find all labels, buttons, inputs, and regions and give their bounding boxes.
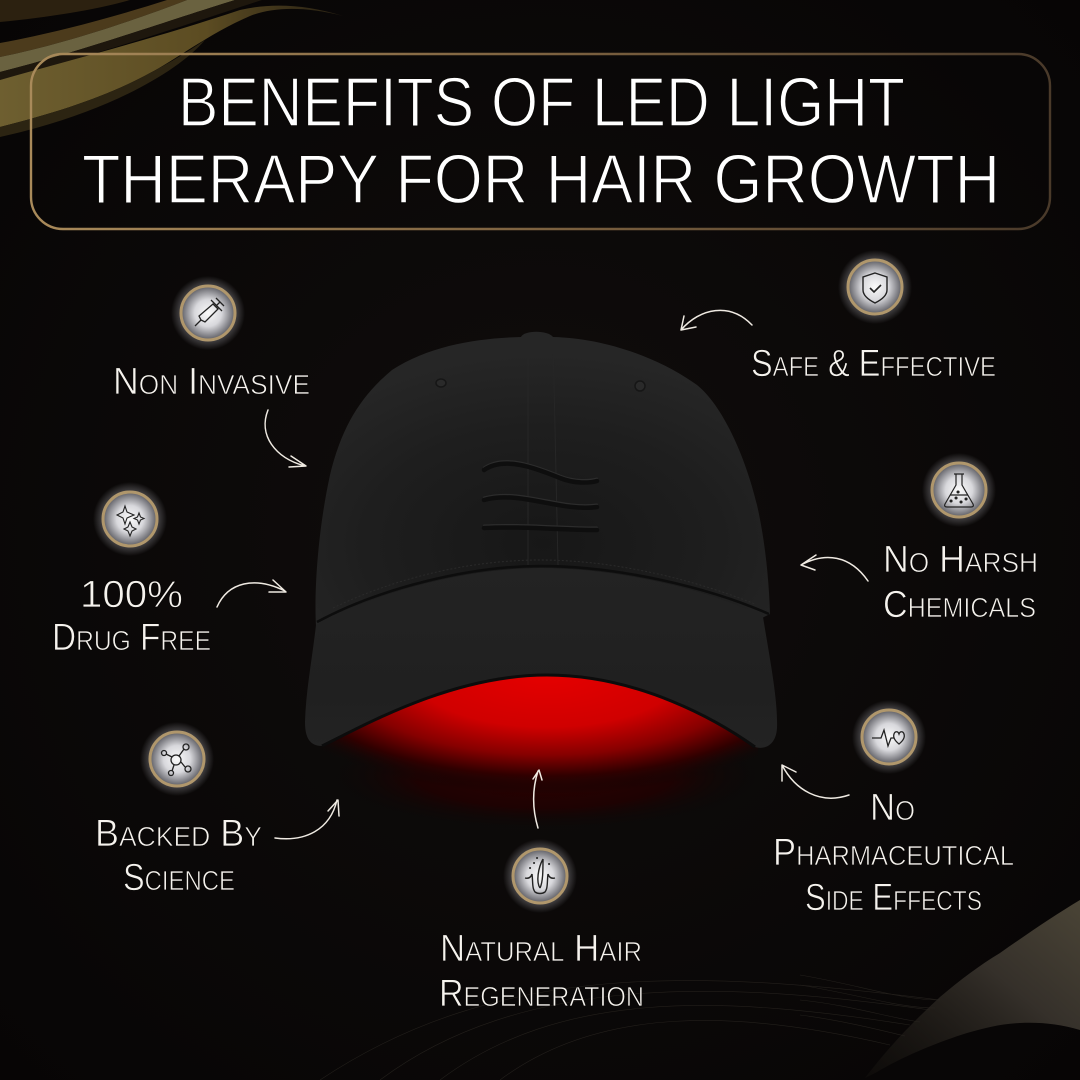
arrow: no pharmaceutical side effects [782, 765, 849, 798]
label: natural hair regeneration [439, 928, 644, 1015]
label: 100% drug free: 100% [80, 574, 183, 616]
label: no pharmaceutical side effects: PHARMACEUTICAL [773, 832, 1014, 874]
label: no harsh chemicals: NO HARSH [883, 539, 1038, 581]
arrow: non invasive [265, 410, 306, 467]
arrow: backed by science [275, 800, 339, 839]
label: no harsh chemicals [883, 539, 1038, 626]
icon: shield [838, 250, 912, 324]
label: no pharmaceutical side effects: NO [870, 787, 915, 829]
arrow: 100% drug free [217, 580, 286, 607]
mesh wave bottom center [320, 975, 940, 1080]
gold wave bottom right [865, 900, 1080, 1078]
icon: hair follicle [503, 839, 577, 913]
hat [305, 332, 777, 748]
gold wave top left [0, 0, 343, 137]
label: 100% drug free: DRUG FREE [52, 617, 211, 659]
label: no pharmaceutical side effects [773, 787, 1014, 919]
label: backed by science: SCIENCE [123, 857, 235, 899]
title box [31, 54, 1050, 229]
title [82, 63, 1000, 218]
label: non invasive: NON INVASIVE [113, 361, 310, 403]
title: BENEFITS OF LED LIGHT [178, 63, 905, 141]
label: no harsh chemicals: CHEMICALS [883, 584, 1036, 626]
label: backed by science: BACKED BY [95, 813, 262, 855]
hat logo [484, 461, 597, 530]
hat eyelets [436, 379, 645, 391]
arrow: safe and effective [681, 310, 752, 330]
arrow: no harsh chemicals [801, 555, 868, 581]
label: natural hair regeneration: REGENERATION [439, 973, 644, 1015]
red LED glow [322, 600, 760, 830]
icon: molecule [140, 722, 214, 796]
icon: heartbeat [852, 700, 926, 774]
icon: syringe [171, 276, 245, 350]
label: no pharmaceutical side effects: SIDE EFFECTS [805, 877, 982, 919]
icon: sparkles [93, 482, 167, 556]
hat crown [316, 332, 770, 626]
arrow: natural hair regeneration [533, 770, 542, 828]
hat brim [305, 568, 777, 748]
icon: flask [922, 453, 996, 527]
label: 100% drug free [52, 574, 211, 659]
label: safe and effective: SAFE & EFFECTIVE [751, 343, 996, 385]
label: backed by science [95, 813, 262, 899]
title: THERAPY FOR HAIR GROWTH [82, 140, 1000, 218]
arrows [217, 310, 868, 839]
label: natural hair regeneration: NATURAL HAIR [440, 928, 642, 970]
